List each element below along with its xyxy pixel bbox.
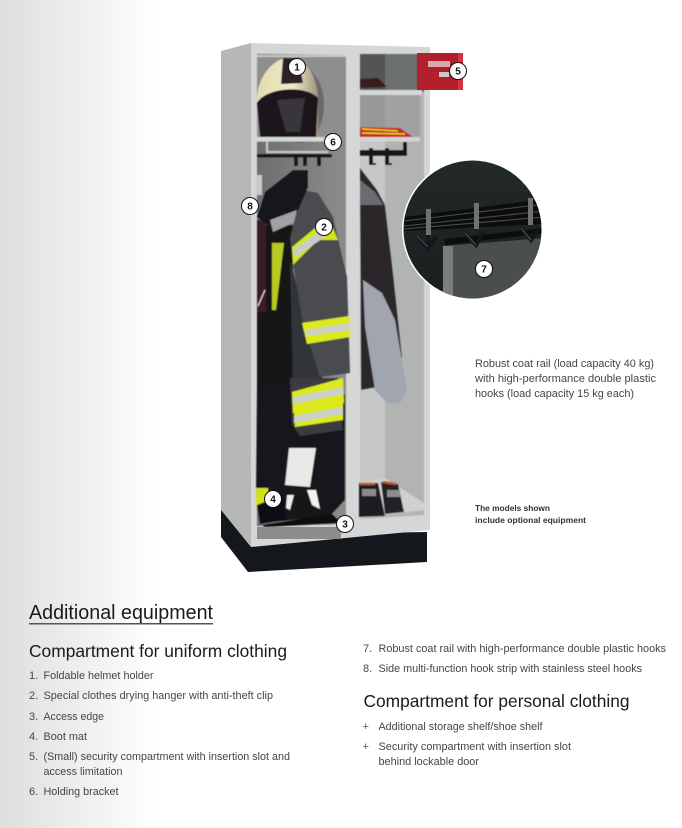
list: personal clothing items (362, 721, 571, 768)
list: uniform clothing items: Holding bracket (44, 786, 118, 798)
page background gradient (0, 0, 158, 828)
upper shelf (360, 90, 422, 95)
heading: compartment for uniform clothing: Compartment for uniform clothing (29, 641, 287, 661)
locker illustration (221, 43, 463, 572)
right coat rail (360, 142, 407, 165)
list: items 7 and 8: 8. (363, 663, 372, 675)
coat rail with hooks (257, 154, 332, 166)
number badges: 1 (294, 62, 300, 74)
list: personal clothing items: Additional storage shelf/shoe shelf (378, 721, 543, 733)
callout: coat rail: with high-performance double plastic (474, 373, 657, 385)
boot mat (262, 514, 342, 527)
number badges: 7 (481, 264, 487, 276)
middle shelf (360, 137, 420, 142)
list: items 7 and 8: Side multi-function hook strip with stainless steel hooks (378, 663, 642, 675)
list: uniform clothing items: Foldable helmet holder (44, 670, 154, 682)
note: optional equipment: The models shown (475, 503, 550, 513)
jacket (257, 170, 350, 436)
gloves on upper shelf (360, 78, 387, 88)
number badges: 2 (321, 222, 327, 234)
list: uniform clothing items: 4. (29, 731, 38, 743)
list: items 7 and 8: 7. (363, 643, 372, 655)
list: uniform clothing items: (Small) security compartment with insertion slot and (44, 751, 290, 763)
locker front frame (251, 43, 430, 547)
helmet shelf (256, 137, 326, 142)
personal jacket (360, 168, 407, 403)
access edge (257, 527, 341, 539)
list: uniform clothing items (29, 670, 290, 798)
number badges: 5 (455, 66, 461, 78)
list: uniform clothing items: 1. (29, 670, 38, 682)
personal shoes (359, 482, 404, 517)
list: uniform clothing items: 3. (29, 711, 38, 723)
list: uniform clothing items: 5. (29, 751, 38, 763)
fire trousers on boot mat (256, 381, 345, 523)
number badges: 3 (342, 520, 348, 530)
detail circle: coat rail hooks (400, 158, 546, 302)
number badges: 4 (270, 494, 276, 506)
list: uniform clothing items: Special clothes drying hanger with anti-theft clip (44, 690, 273, 702)
list: uniform clothing items: 6. (29, 786, 38, 798)
list: uniform clothing items: access limitation (44, 766, 122, 778)
heading: additional equipment: Additional equipment (29, 601, 213, 624)
folded straps on shelf (360, 127, 413, 137)
list: items 7 and 8: Robust coat rail with high-performance double plastic hooks (378, 643, 666, 655)
trouser label (285, 448, 316, 487)
hook strip items (256, 175, 262, 195)
list: personal clothing items: Security compartment with insertion slot (378, 741, 571, 753)
number badges (242, 58, 492, 532)
list: uniform clothing items: Access edge (44, 711, 104, 723)
list: personal clothing items: + (362, 741, 369, 753)
note: optional equipment (475, 503, 586, 525)
note: optional equipment: include optional equipment (475, 515, 586, 525)
callout: coat rail (474, 358, 657, 400)
list: personal clothing items: behind lockable door (378, 756, 479, 768)
locker side panel (221, 43, 251, 547)
holding bracket (267, 141, 328, 152)
list: personal clothing items: + (362, 721, 369, 733)
list: uniform clothing items: Boot mat (44, 731, 87, 743)
right compartment (359, 54, 424, 519)
callout: coat rail: hooks (load capacity 15 kg each) (475, 388, 634, 400)
boots (256, 488, 268, 506)
callout: coat rail: Robust coat rail (load capacity 40 kg) (475, 358, 654, 370)
security compartment door (417, 53, 463, 90)
number badges: 8 (247, 202, 253, 212)
heading: compartment for personal clothing: Compartment for personal clothing (364, 691, 630, 711)
number badges: 6 (330, 138, 336, 148)
list: uniform clothing items: 2. (29, 690, 38, 702)
helmet (257, 58, 324, 143)
list: items 7 and 8 (363, 643, 666, 675)
left compartment (256, 54, 350, 527)
plinth (221, 510, 427, 572)
